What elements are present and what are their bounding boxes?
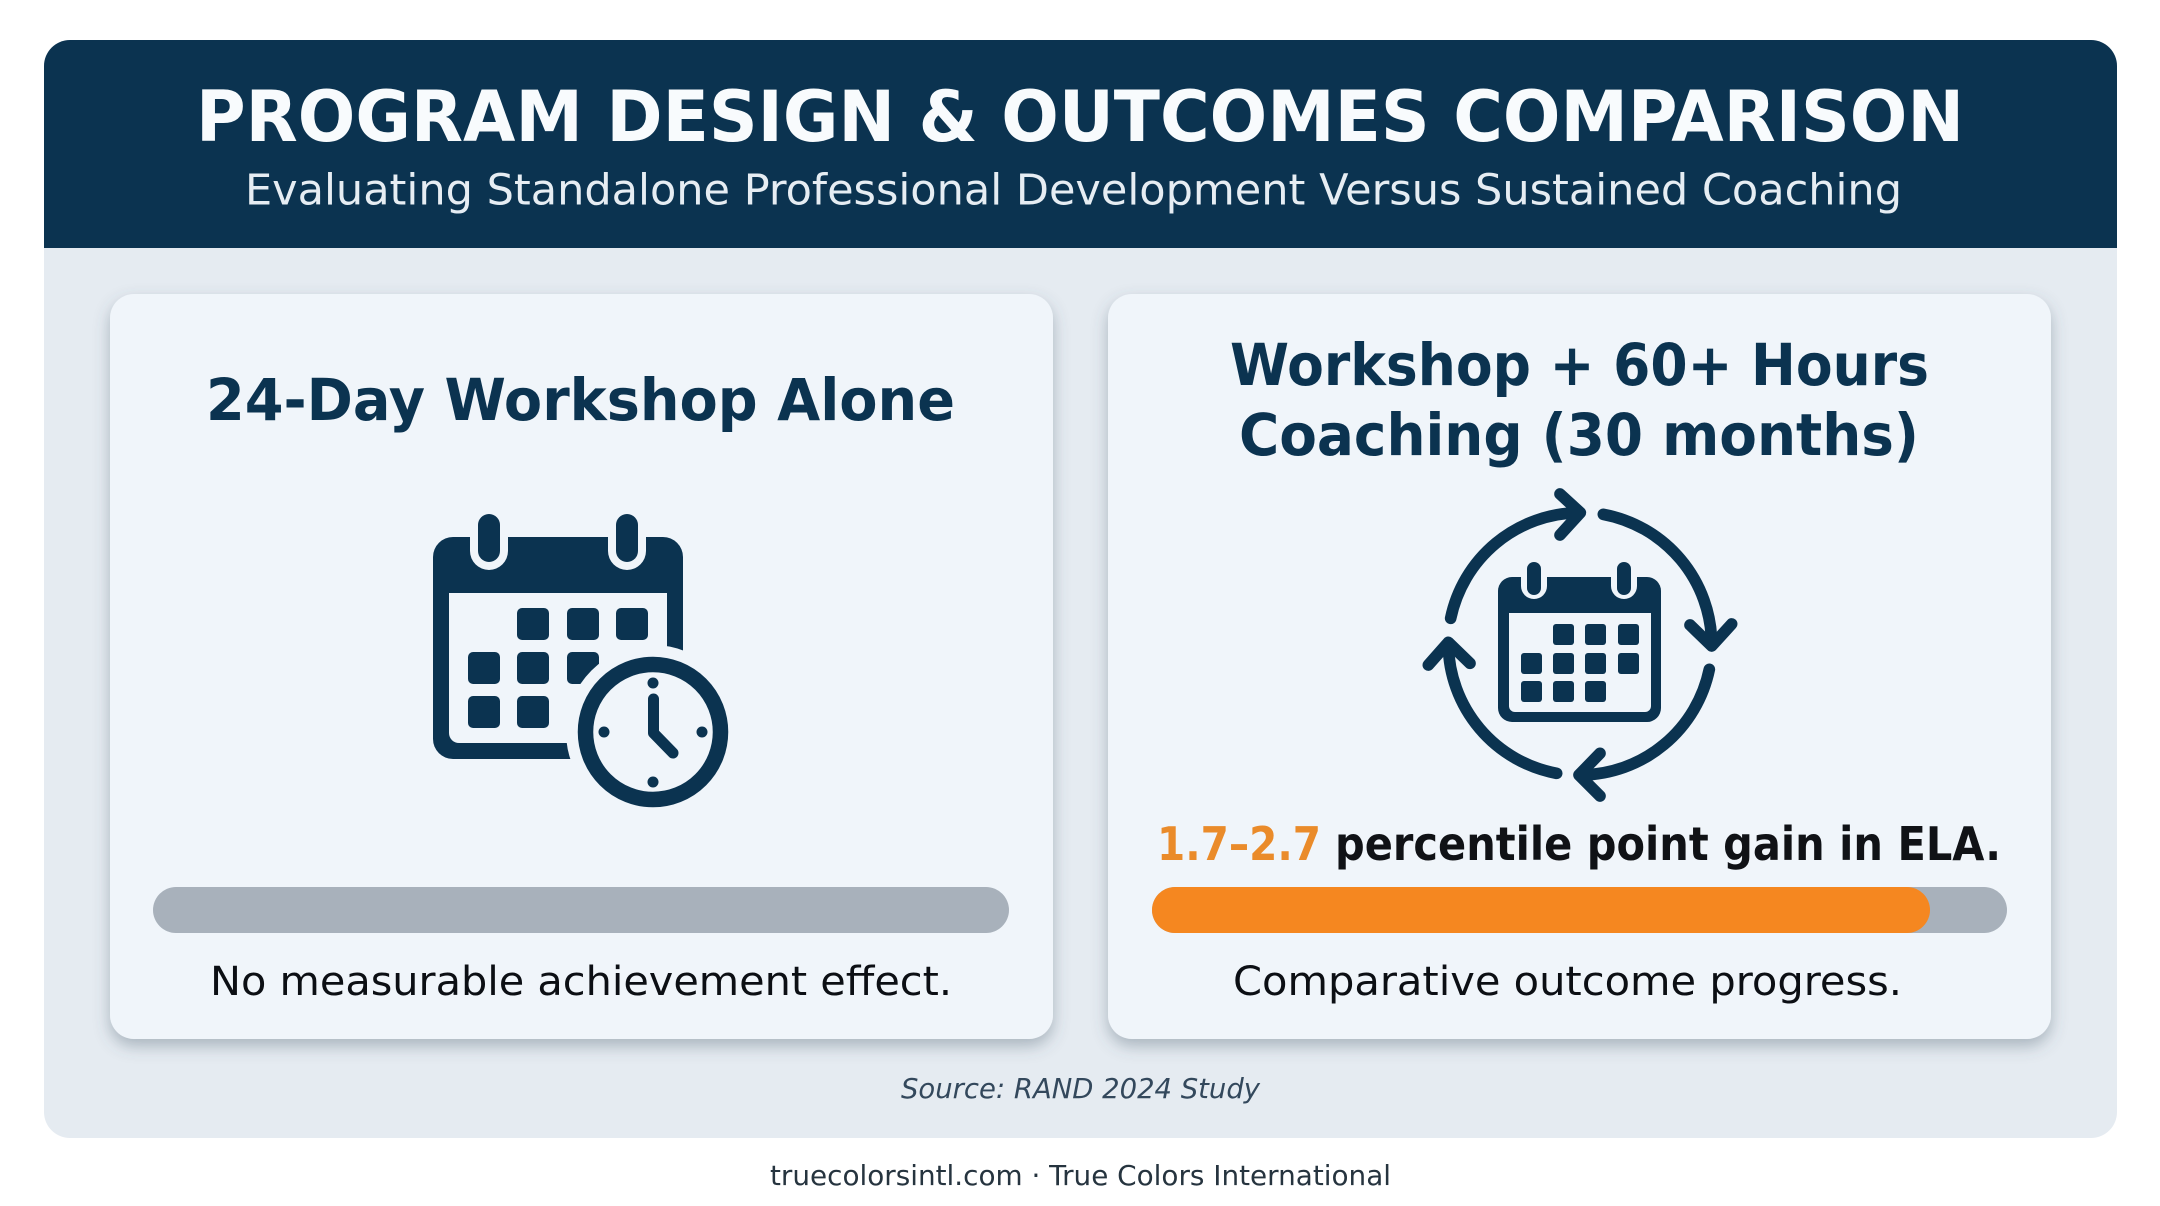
text: no measurable effect: No measurable achievement effect.	[210, 959, 952, 1005]
stat: percentile point gain: 1.7–2.7	[1157, 817, 1321, 871]
heading: workshop plus coaching	[1230, 331, 1929, 469]
heading: workshop plus coaching: Workshop + 60+ Hours	[1230, 331, 1929, 399]
title: PROGRAM DESIGN & OUTCOMES COMPARISON	[196, 76, 1964, 158]
bar: no effect	[153, 887, 1009, 933]
subtitle: Evaluating Standalone Professional Development Versus Sustained Coaching	[245, 166, 1902, 216]
panel: workshop plus coaching	[1108, 294, 2051, 1039]
header banner	[44, 40, 2117, 248]
icon: calendar in cycle arrows	[1428, 494, 1732, 796]
source note: Source: RAND 2024 Study	[901, 1072, 1260, 1105]
icon: calendar with clock	[433, 509, 740, 819]
heading: 24-day workshop alone: 24-Day Workshop Alone	[206, 366, 955, 434]
stat: percentile point gain: percentile point gain in ELA.	[1335, 817, 2001, 871]
footer: truecolorsintl.com · True Colors International	[770, 1159, 1391, 1192]
bar: comparative progress	[1152, 887, 2007, 933]
text: comparative outcome: Comparative outcome progress.	[1233, 959, 1902, 1005]
heading: workshop plus coaching: Coaching (30 months)	[1239, 401, 1919, 469]
panel: workshop alone	[110, 294, 1053, 1039]
